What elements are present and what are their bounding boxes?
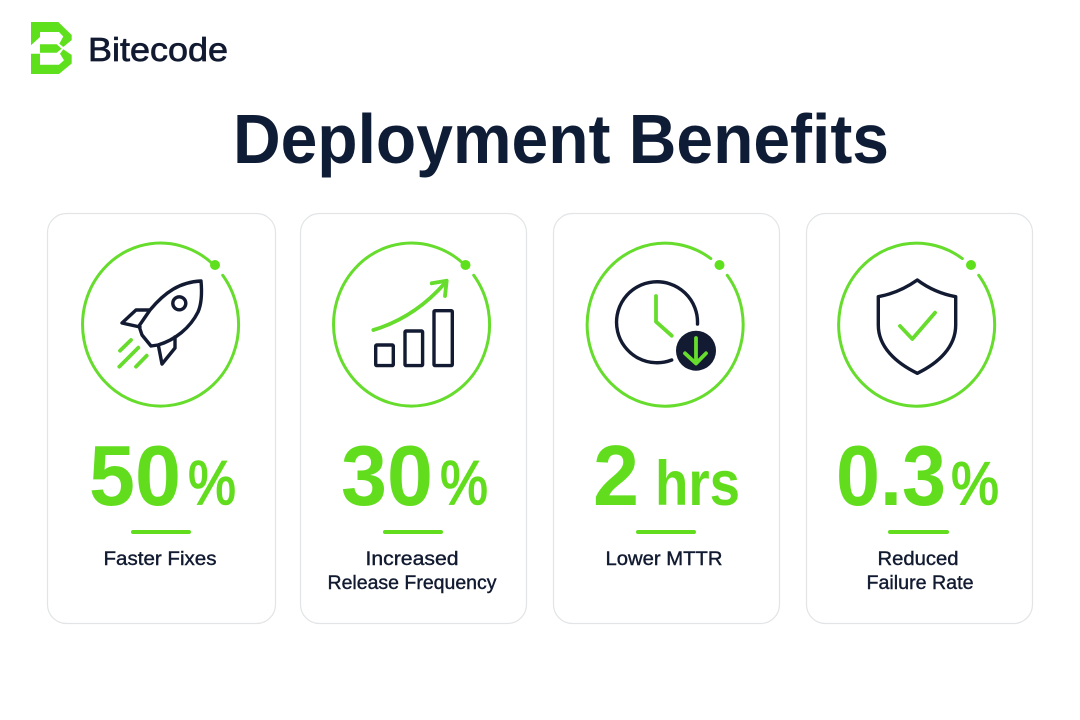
label [866, 548, 974, 594]
icon: shield with check in ring [839, 243, 995, 406]
label: Reduced [878, 548, 958, 570]
panel: increased release frequency [300, 214, 526, 624]
panel: faster fixes [48, 214, 276, 624]
icon: rising bar chart in ring [334, 243, 490, 406]
panel: increased release frequency: % [440, 449, 488, 518]
label: Failure Rate [866, 572, 974, 594]
logo [31, 22, 228, 74]
label: Release Frequency [328, 572, 497, 594]
label [328, 548, 497, 594]
panel: lower mttr [554, 214, 780, 624]
panel: faster fixes: % [188, 449, 236, 518]
panel: lower mttr: hrs [655, 449, 740, 519]
label: Lower MTTR [606, 548, 722, 570]
stat: 0.3%: 0.3 [836, 429, 946, 524]
stat: 2 hrs: 2 [593, 429, 639, 524]
label: Faster Fixes [104, 548, 217, 570]
brand name: Bitecode [88, 31, 228, 68]
label: Increased [366, 548, 458, 570]
panel: reduced failure rate [806, 214, 1032, 624]
stat: 30%: 30 [341, 429, 433, 524]
icon: rocket in ring [83, 243, 239, 406]
stat: 50%: 50 [89, 429, 181, 524]
title: Deployment Benefits [233, 100, 889, 178]
icon: clock with down arrow in ring [587, 243, 743, 406]
icon: Bitecode B mark [31, 22, 72, 74]
panel: reduced failure rate: % [951, 450, 999, 517]
